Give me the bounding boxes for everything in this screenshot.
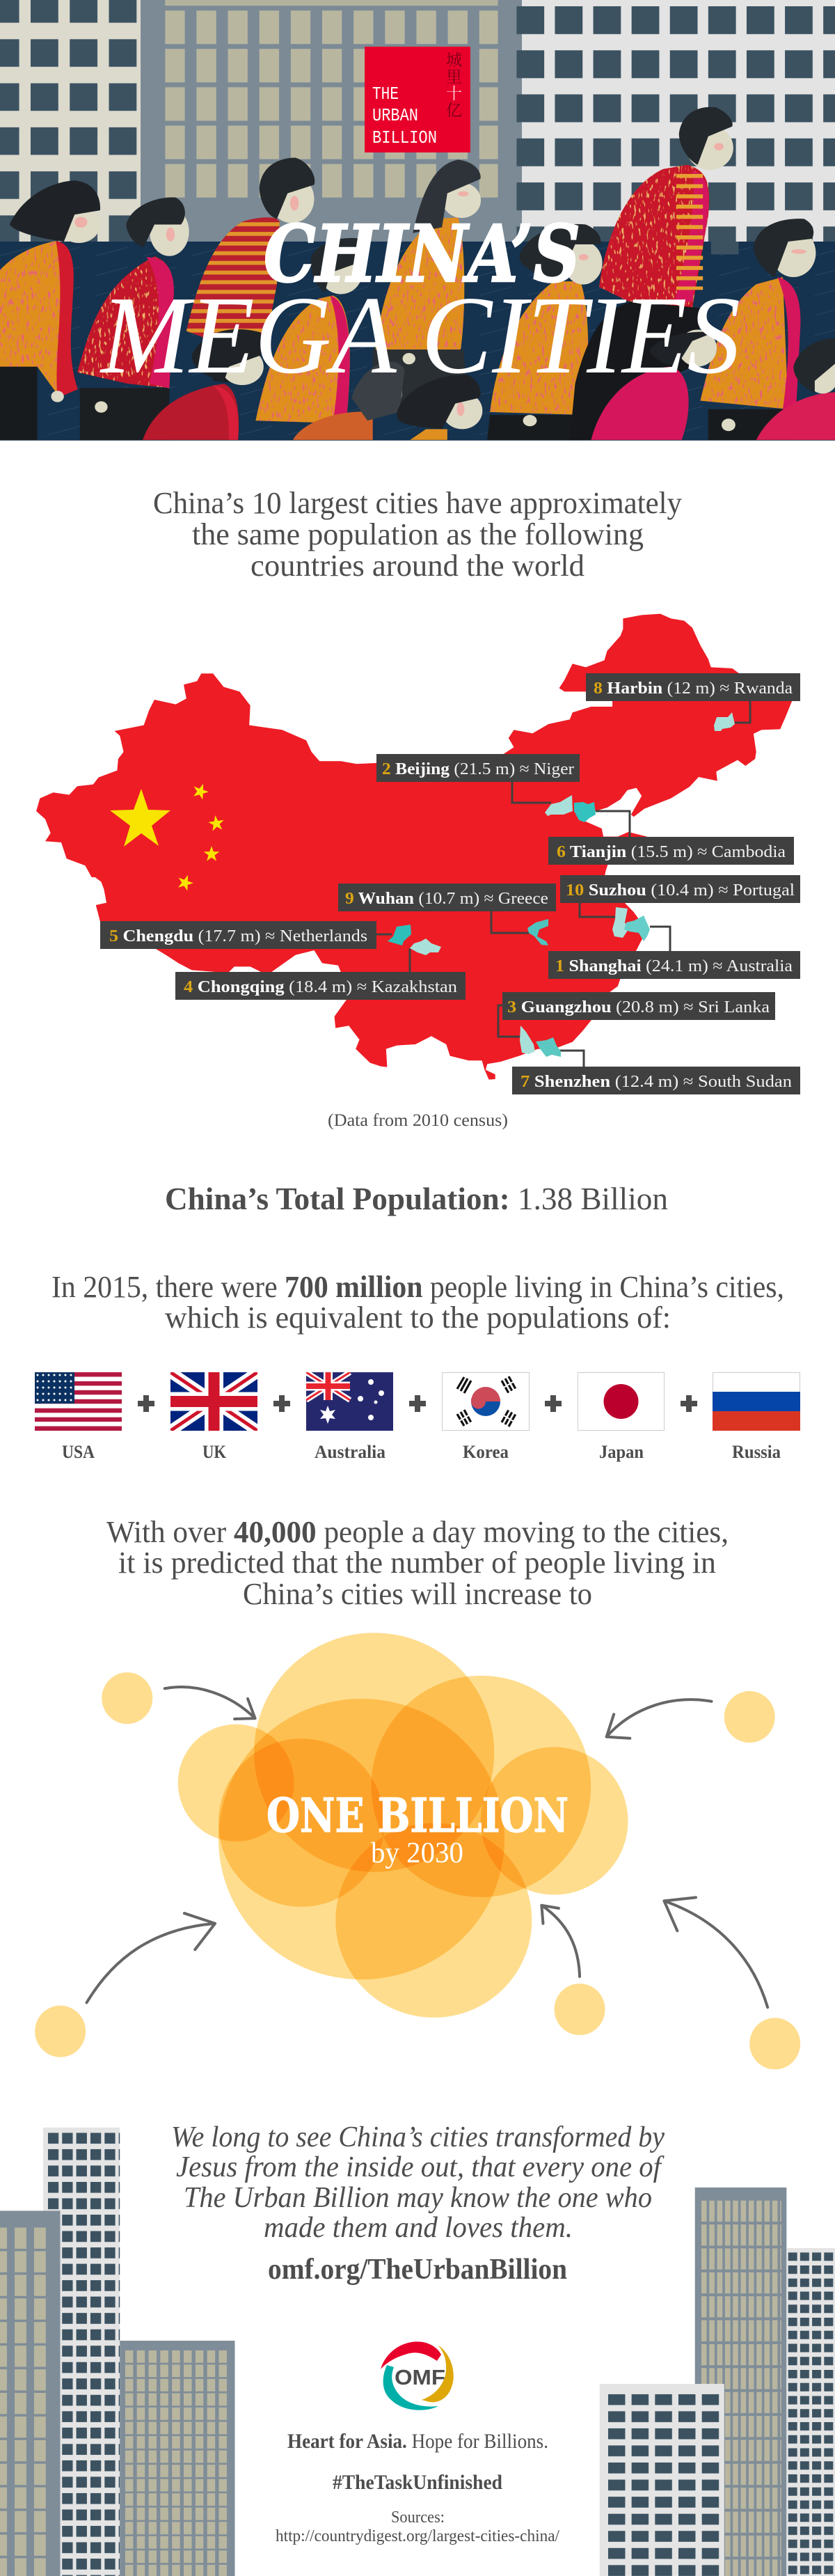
label: Wuhan bbox=[338, 883, 556, 911]
OMF logo: OMF bbox=[395, 2365, 445, 2389]
one billion graphic bbox=[35, 1633, 800, 2069]
flag labels: Australia bbox=[315, 1442, 385, 1462]
building: white lower right bbox=[600, 2384, 724, 2576]
one billion text: ONE BILLION bbox=[267, 1788, 568, 1843]
sources bbox=[276, 2508, 559, 2545]
building: tall white left bbox=[43, 2128, 120, 2576]
logo: The Urban Billion: THE bbox=[372, 84, 399, 104]
plus bbox=[273, 1395, 290, 1412]
sources: http://countrydigest.org/largest-cities-china/ bbox=[276, 2527, 559, 2545]
country shape: Australia bbox=[624, 916, 650, 941]
building: grey far left bbox=[0, 2210, 60, 2576]
label: Suzhou: 10 Suzhou (10.4 m) ≈ Portugal bbox=[566, 881, 795, 900]
flag labels: USA bbox=[62, 1442, 95, 1462]
label: Shenzhen: 7 Shenzhen (12.4 m) ≈ South Sudan bbox=[520, 1073, 792, 1091]
700 million text: In 2015, there were 700 million people living in China’s cities, bbox=[51, 1270, 784, 1304]
quote: The Urban Billion may know the one who bbox=[184, 2182, 652, 2214]
logo: The Urban Billion: BILLION bbox=[372, 127, 437, 148]
person: bottom left red bbox=[143, 329, 264, 440]
person: centre long hair bbox=[373, 159, 481, 404]
intro text bbox=[153, 486, 682, 583]
tagline: Heart for Asia. Hope for Billions. bbox=[287, 2430, 548, 2453]
40,000 text: it is predicted that the number of people living in bbox=[118, 1546, 716, 1580]
total population heading: China’s Total Population: 1.38 Billion bbox=[165, 1181, 668, 1216]
plus bbox=[409, 1395, 426, 1412]
connector lines bbox=[376, 701, 750, 1067]
700 million text: which is equivalent to the populations of: bbox=[165, 1301, 671, 1335]
building: grey lower left bbox=[120, 2341, 234, 2576]
logo: The Urban Billion: URBAN bbox=[372, 105, 418, 126]
hero banner bbox=[0, 0, 835, 441]
hashtag: #TheTaskUnfinished bbox=[333, 2471, 502, 2494]
arrows bbox=[87, 1687, 768, 2007]
country shape: Greece bbox=[527, 919, 548, 945]
label: Harbin: 8 Harbin (12 m) ≈ Rwanda bbox=[594, 680, 793, 698]
flag: Korea bbox=[442, 1372, 530, 1431]
logo: The Urban Billion: 十 bbox=[446, 85, 462, 102]
logo: The Urban Billion: 城 bbox=[446, 52, 462, 69]
street bbox=[0, 242, 835, 441]
building: left bbox=[0, 0, 141, 244]
flag: UK bbox=[170, 1372, 257, 1431]
building: grey tall right bbox=[695, 2188, 786, 2576]
quote: We long to see China’s cities transformed by bbox=[171, 2121, 665, 2153]
website: omf.org/TheUrbanBillion bbox=[268, 2254, 567, 2286]
country shape: Niger bbox=[545, 795, 573, 816]
country shape: Cambodia bbox=[574, 802, 596, 822]
title: Mega Cities: MEGA CITIES bbox=[100, 273, 740, 397]
quote bbox=[171, 2121, 665, 2244]
flag stars on the map bbox=[110, 781, 225, 892]
flag: Russia bbox=[713, 1372, 800, 1431]
country shape: Portugal bbox=[612, 907, 628, 938]
map outline: south bbox=[85, 858, 647, 1080]
label: Tianjin: 6 Tianjin (15.5 m) ≈ Cambodia bbox=[557, 843, 786, 861]
flag labels: Korea bbox=[463, 1442, 509, 1462]
person: tall right bbox=[599, 107, 733, 308]
overlapping circles bbox=[178, 1633, 628, 2018]
plus bbox=[681, 1395, 697, 1412]
person: centre back left with stripes bbox=[186, 158, 315, 384]
label: Guangzhou: 3 Guangzhou (20.8 m) ≈ Sri Lanka bbox=[507, 998, 770, 1016]
intro text: countries around the world bbox=[250, 549, 584, 583]
person: dark trousers block bbox=[570, 301, 703, 440]
flag: Japan bbox=[578, 1372, 665, 1431]
flag labels bbox=[62, 1442, 781, 1462]
building: white far right bbox=[787, 2248, 835, 2576]
label: Harbin bbox=[586, 673, 800, 701]
intro text: China’s 10 largest cities have approximately bbox=[153, 486, 682, 520]
country shape: Sri Lanka bbox=[520, 1026, 535, 1054]
label: Shenzhen bbox=[512, 1067, 800, 1094]
person: right orange bbox=[700, 219, 816, 440]
label: Beijing bbox=[376, 754, 580, 782]
country shape: South Sudan bbox=[536, 1037, 561, 1057]
data note: (Data from 2010 census) bbox=[328, 1111, 508, 1130]
person: bottom right of centre red bbox=[591, 330, 717, 440]
person: centre front orange bbox=[255, 238, 362, 423]
flag labels: Japan bbox=[599, 1442, 644, 1462]
footer bbox=[0, 2121, 835, 2576]
flag: Australia bbox=[306, 1372, 393, 1431]
40,000 text bbox=[106, 1515, 729, 1611]
40,000 text: With over 40,000 people a day moving to the cities, bbox=[106, 1515, 729, 1549]
flag labels: Russia bbox=[732, 1442, 781, 1462]
building: right bbox=[516, 0, 835, 254]
sources: Sources: bbox=[391, 2508, 445, 2527]
person: bottom far right bbox=[756, 338, 835, 440]
footer buildings bbox=[0, 2128, 835, 2576]
label: Shanghai: 1 Shanghai (24.1 m) ≈ Australia bbox=[555, 957, 793, 975]
country shape: Rwanda bbox=[714, 712, 735, 731]
label: Suzhou bbox=[560, 875, 800, 903]
building: middle bbox=[141, 0, 522, 244]
logo: The Urban Billion: 里 bbox=[446, 68, 462, 86]
map of China bbox=[36, 614, 800, 1094]
label: Chongqing bbox=[175, 972, 466, 1000]
map outline: north bbox=[36, 614, 799, 877]
person: left red sweater bbox=[77, 198, 189, 440]
label: Chongqing: 4 Chongqing (18.4 m) ≈ Kazakhstan bbox=[184, 978, 457, 996]
label: Guangzhou bbox=[502, 992, 775, 1020]
40,000 text: China’s cities will increase to bbox=[243, 1577, 592, 1611]
label: Chengdu bbox=[100, 921, 376, 949]
small circles bbox=[35, 1672, 800, 2069]
label: Chengdu: 5 Chengdu (17.7 m) ≈ Netherlands bbox=[109, 927, 367, 945]
logo: The Urban Billion bbox=[365, 47, 470, 152]
hero illustration: buildings and crowd bbox=[0, 0, 835, 441]
person: far left bob bbox=[0, 180, 100, 440]
label: Tianjin bbox=[548, 837, 794, 865]
label: Beijing: 2 Beijing (21.5 m) ≈ Niger bbox=[382, 760, 574, 778]
intro text: the same population as the following bbox=[192, 517, 644, 551]
flag: USA bbox=[35, 1372, 122, 1431]
title: China's: CHINA’S bbox=[264, 209, 580, 300]
by 2030 text: by 2030 bbox=[371, 1837, 463, 1869]
country shape: Kazakhstan bbox=[410, 938, 441, 955]
plus bbox=[545, 1395, 562, 1412]
flag labels: UK bbox=[202, 1442, 227, 1462]
logo: The Urban Billion: 亿 bbox=[446, 102, 462, 119]
label: Wuhan: 9 Wuhan (10.7 m) ≈ Greece bbox=[345, 890, 548, 908]
OMF logo bbox=[381, 2341, 454, 2410]
700 million text bbox=[51, 1270, 784, 1335]
country shape: Netherlands bbox=[388, 925, 411, 945]
label: Shanghai bbox=[548, 951, 800, 979]
quote: Jesus from the inside out, that every one of bbox=[176, 2151, 665, 2183]
plus bbox=[138, 1395, 154, 1412]
quote: made them and loves them. bbox=[264, 2212, 573, 2244]
person: bottom centre bbox=[293, 361, 482, 440]
person: right of centre orange bbox=[487, 224, 603, 440]
flags row bbox=[35, 1372, 800, 1462]
